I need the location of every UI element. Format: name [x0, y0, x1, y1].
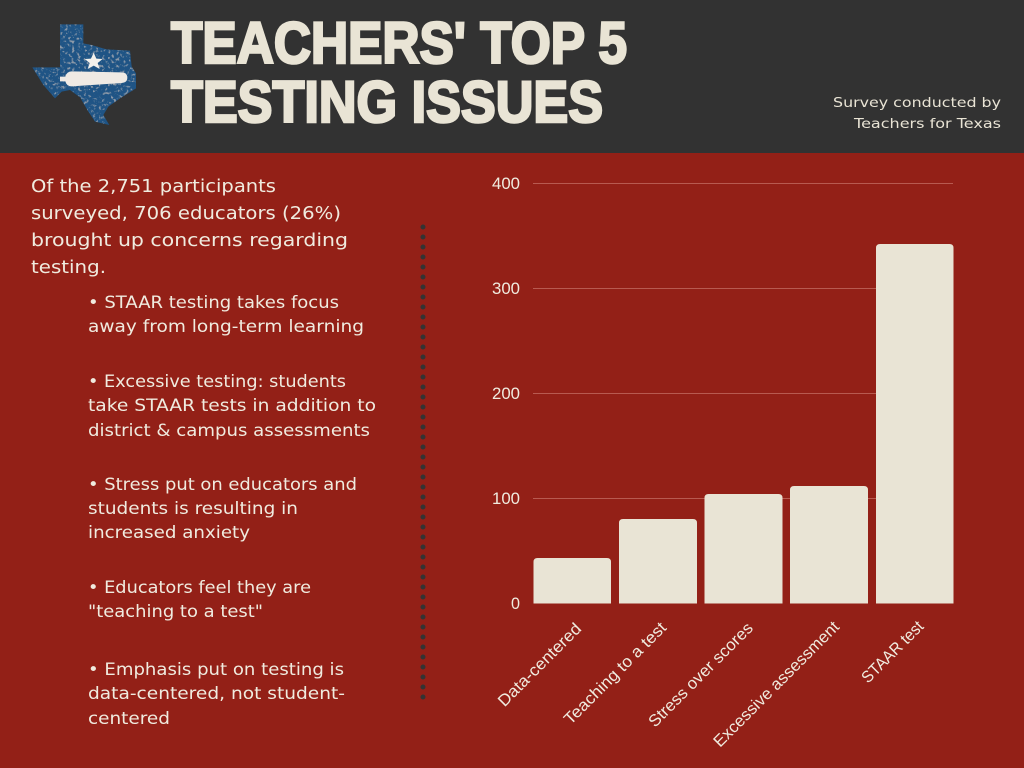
bullet: excessive testing: take STAAR tests in addition to	[88, 396, 376, 415]
intro paragraph: surveyed, 706 educators (26%)	[31, 204, 341, 224]
survey credit: Teachers for Texas	[853, 116, 1001, 132]
bullet: long-term learning: away from long-term learning	[88, 317, 364, 336]
survey credit: Survey conducted by	[833, 95, 1001, 111]
header band	[0, 0, 1024, 153]
y axis labels	[492, 175, 520, 613]
x axis labels: Excessive assessment	[710, 618, 843, 751]
y axis labels: 400	[492, 175, 520, 193]
x axis labels: Data-centered	[495, 620, 585, 710]
bullet: stress: increased anxiety	[88, 523, 250, 542]
bullet: excessive testing: • Excessive testing: students	[88, 372, 346, 391]
y axis labels: 0	[511, 595, 520, 613]
intro paragraph: testing.	[31, 258, 106, 278]
dotted divider	[420, 227, 426, 698]
bullet: teaching to a test: • Educators feel they are	[88, 578, 311, 597]
bullet: stress: students is resulting in	[88, 499, 298, 518]
bar chart	[492, 175, 954, 751]
x axis labels	[495, 617, 928, 751]
issue list	[88, 293, 376, 728]
intro paragraph: Of the 2,751 participants	[31, 177, 276, 197]
bullet: long-term learning	[88, 293, 364, 336]
y axis labels: 300	[492, 280, 520, 298]
x axis labels: STAAR test	[858, 617, 928, 687]
bullet: stress	[88, 475, 357, 542]
y axis labels: 100	[492, 490, 520, 508]
bullet: excessive testing	[88, 372, 376, 440]
x axis labels: Teaching to a test	[561, 618, 671, 728]
icon: Texas map with star and cannon	[30, 23, 138, 127]
bullet: teaching to a test	[88, 578, 311, 621]
bars	[534, 244, 954, 604]
intro paragraph	[31, 177, 348, 278]
x axis labels: Stress over scores	[645, 619, 757, 731]
bullet: data-centered: data-centered, not student-	[88, 684, 345, 703]
intro paragraph: brought up concerns regarding	[31, 231, 348, 251]
bullet: data-centered: • Emphasis put on testing is	[88, 660, 344, 679]
bullet: stress: • Stress put on educators and	[88, 475, 357, 494]
bullet: long-term learning: • STAAR testing takes focus	[88, 293, 339, 312]
title: TESTING ISSUES	[171, 70, 603, 135]
bullet: data-centered	[88, 660, 345, 728]
survey credit	[833, 95, 1001, 132]
bullet: teaching to a test: "teaching to a test"	[88, 602, 263, 621]
title: TEACHERS' TOP 5	[171, 11, 627, 76]
y axis labels: 200	[492, 385, 520, 403]
bullet: excessive testing: district & campus assessments	[88, 421, 370, 440]
title	[171, 11, 627, 135]
bullet: data-centered: centered	[88, 709, 170, 728]
